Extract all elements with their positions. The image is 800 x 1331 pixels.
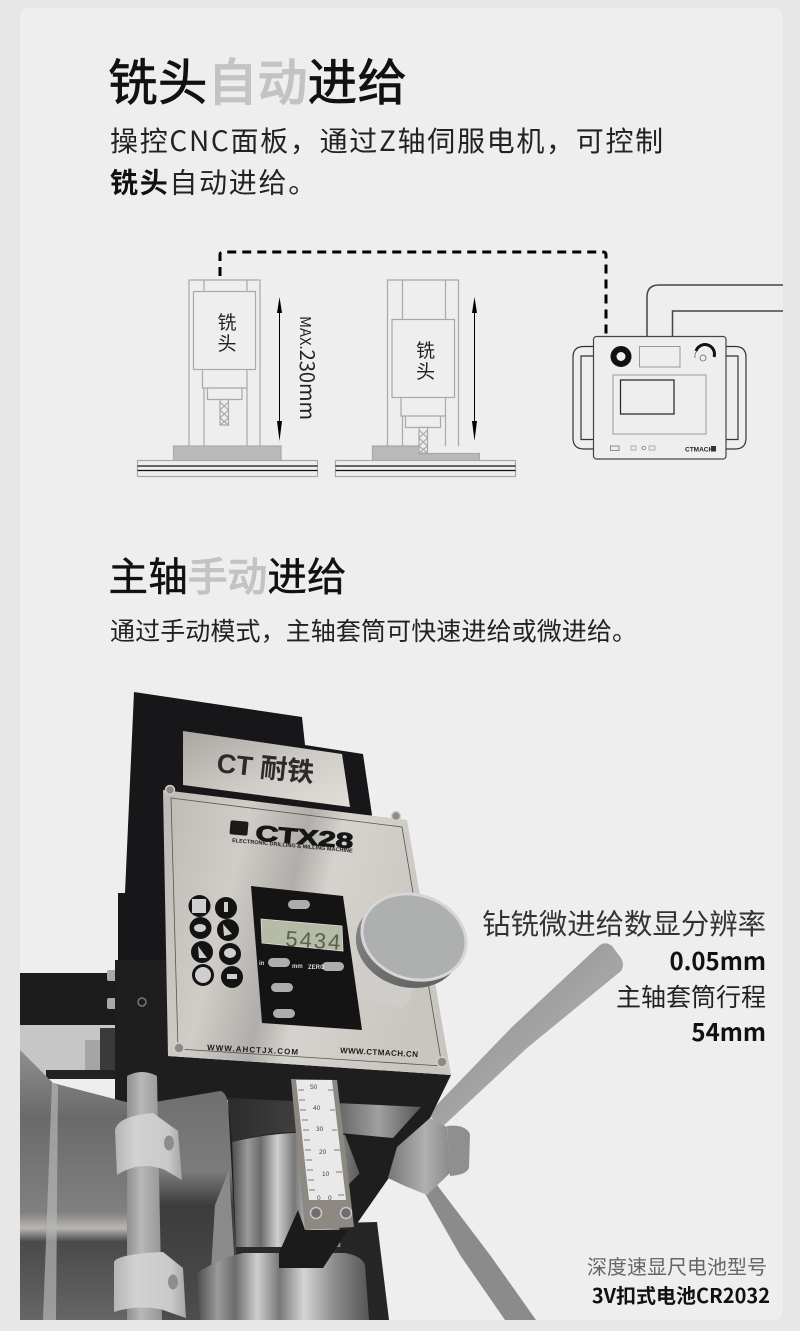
depth scale: 10	[322, 1171, 330, 1178]
controller bottom indicators	[610, 446, 655, 450]
model name: CTX28	[255, 821, 354, 854]
readout labels: in	[259, 961, 265, 967]
website right: WWW.CTMACH.CN	[340, 1046, 418, 1059]
website left: WWW.AHCTJX.COM	[207, 1043, 299, 1057]
photo: drilling and milling machine head	[20, 692, 623, 1320]
guard fold highlight	[43, 1082, 58, 1320]
callout: readout resolution and quill travel: 0.05mm	[669, 942, 766, 977]
diagram part: cutter bit	[419, 428, 428, 453]
callout: readout resolution and quill travel	[482, 902, 766, 1048]
black stop block	[279, 1210, 348, 1268]
lever upper	[428, 943, 623, 1128]
diagram part: cutter bit	[220, 400, 228, 425]
black rear bracket	[339, 1222, 389, 1320]
callout: readout resolution and quill travel: 钻铣微进给数显分辨率	[482, 902, 766, 943]
controller screen	[620, 380, 674, 414]
readout value: 5434	[285, 926, 341, 955]
black body under panel	[115, 960, 451, 1245]
callout: battery model: 3V扣式电池CR2032	[592, 1280, 770, 1309]
label: milling head	[218, 308, 237, 356]
label: milling head	[416, 336, 435, 384]
lever hub	[388, 1118, 470, 1195]
controller handles	[573, 346, 746, 449]
steel control panel	[163, 786, 451, 1075]
label: milling head: 铣	[416, 336, 435, 363]
text block: auto feed description: 操控CNC面板，通过Z轴伺服电机，可控制	[110, 120, 665, 160]
black rear column	[118, 692, 372, 1062]
clamp lower	[114, 1252, 186, 1318]
guard right	[155, 1091, 240, 1320]
controller brand: CTMACH	[685, 446, 713, 454]
depth scale: 50	[310, 1084, 318, 1091]
diagram part: table	[336, 460, 516, 476]
diagram part: workpiece	[174, 446, 281, 460]
depth scale: 0	[317, 1195, 321, 1202]
label: max travel: MAX. 230mm	[294, 316, 323, 420]
diagram: CNC controller	[573, 336, 746, 459]
controller logo mark	[711, 446, 716, 452]
readout buttons	[268, 900, 344, 1018]
depth scale	[291, 1079, 354, 1230]
heading: spindle manual feed: 主轴手动进给	[108, 546, 347, 603]
arrow: travel range	[277, 297, 282, 441]
safety icon marks	[192, 899, 237, 983]
readout labels	[259, 961, 325, 971]
threaded rod	[46, 1070, 116, 1079]
readout labels: ZERO	[308, 965, 325, 971]
scale ticks	[298, 1090, 344, 1195]
guide rod	[127, 1072, 162, 1320]
diagram: milling head raised	[138, 280, 323, 476]
safety icons	[188, 895, 243, 988]
controller dial	[695, 345, 714, 361]
diagram part: workpiece with cut	[372, 446, 480, 460]
controller knob	[614, 349, 628, 364]
depth scale: 30	[316, 1126, 324, 1133]
diagram part: table	[138, 460, 318, 476]
panel screws	[166, 786, 447, 1067]
text block: manual feed description: 通过手动模式，主轴套筒可快速进给或微进给。	[110, 612, 637, 648]
spindle cylinder upper	[232, 1133, 362, 1247]
depth scale: 0	[328, 1195, 332, 1202]
left silver block	[20, 1025, 115, 1075]
left black strip	[20, 973, 116, 1025]
side screws	[107, 970, 117, 1009]
text block: auto feed description: 铣头自动进给。	[110, 162, 318, 202]
arrow: travel range	[472, 297, 477, 441]
spindle cylinder lower	[197, 1253, 369, 1320]
title: milling head auto feed: 铣头自动进给	[108, 44, 407, 115]
depth scale: 40	[313, 1105, 321, 1112]
lit casting	[228, 1098, 421, 1142]
diagram: milling head lowered	[336, 280, 516, 476]
name plate	[183, 731, 350, 807]
feed knob	[344, 881, 477, 1011]
depth scale: 20	[319, 1149, 327, 1156]
small column bolt	[138, 998, 146, 1006]
diagram part: head box	[392, 320, 454, 398]
diagram: cables to machine	[647, 285, 783, 337]
scale screws	[310, 1208, 352, 1218]
model subtitle: ELECTRONIC DRILLING & MILLING MACHINE	[232, 838, 353, 855]
callout: readout resolution and quill travel: 54mm	[691, 1013, 766, 1048]
callout: battery model: 深度速显尺电池型号	[587, 1251, 767, 1280]
callout: readout resolution and quill travel: 主轴套筒行程	[616, 978, 766, 1014]
brand logo	[229, 820, 249, 836]
diagram part: head box	[194, 292, 256, 370]
label: milling head: 头	[416, 357, 435, 384]
cylinder gap shadow	[225, 1240, 360, 1260]
black casting diagonal	[343, 1107, 429, 1247]
label: milling head: 铣	[218, 308, 237, 335]
controller display	[640, 346, 680, 367]
controller gray frame	[613, 375, 706, 434]
guard bright strip	[208, 1170, 238, 1320]
diagram: dashed control signal line	[220, 252, 606, 338]
guard left	[20, 1050, 130, 1320]
readout labels: mm	[292, 964, 303, 970]
logo text: CT 耐铁	[215, 748, 315, 788]
label: milling head: 头	[218, 329, 237, 356]
text block: auto feed description	[110, 120, 665, 202]
lever lower	[423, 1185, 536, 1320]
clamp upper	[115, 1113, 182, 1180]
controller body	[594, 336, 726, 459]
digital readout	[251, 886, 362, 1030]
callout: battery model	[587, 1251, 770, 1309]
